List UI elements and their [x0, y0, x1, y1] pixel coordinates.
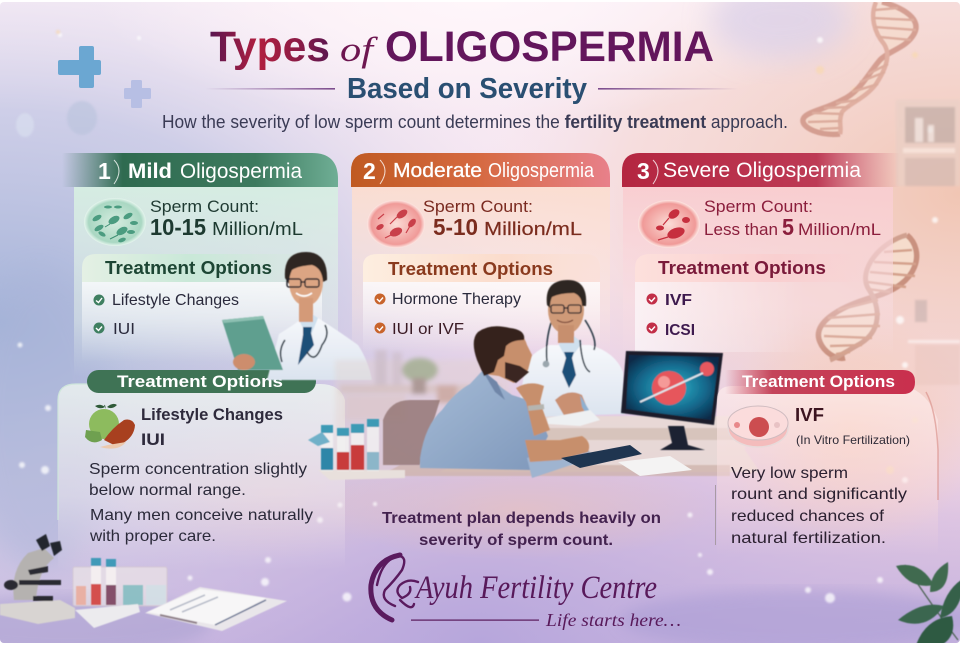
illustration: test tubes	[308, 419, 405, 480]
header: moderate: Moderate	[393, 159, 482, 182]
icon: sperm cells green	[84, 198, 146, 246]
text: mild description: Sperm concentration slightly	[89, 461, 307, 478]
text: mild description: with proper care.	[89, 528, 216, 545]
treatment options: moderate: IUI or IVF	[392, 321, 464, 338]
caption: treatment plan: severity of sperm count.	[419, 532, 613, 549]
illustration: green leaves	[896, 562, 964, 645]
text: mild options list: Lifestyle Changes	[141, 405, 283, 424]
sperm count: mild: Million/mL	[212, 218, 303, 239]
text: mild options list	[142, 408, 282, 445]
text: IVF heading	[795, 405, 910, 447]
title	[210, 31, 713, 70]
sperm count: severe: 5	[782, 214, 794, 240]
illustration: desk	[380, 416, 760, 476]
icon: small medical cross	[124, 80, 151, 108]
panel: moderate oligospermia	[351, 153, 610, 357]
logo swirl	[371, 555, 418, 620]
icon: petri dish	[728, 406, 788, 447]
text: severe description: rount and significantly	[731, 486, 907, 503]
illustration: keyboard	[561, 445, 642, 468]
header: moderate: 2	[363, 158, 376, 184]
pill heading: mild	[87, 370, 316, 393]
illustration: doctor with clipboard	[222, 252, 372, 380]
title: OLIGOSPERMIA	[385, 23, 714, 71]
icon: sperm cells red	[638, 200, 700, 248]
illustration: doctor at desk	[517, 280, 625, 426]
text: IVF heading: (In Vitro Fertilization)	[796, 433, 910, 447]
treatment options: severe: ICSI	[665, 322, 695, 339]
header: moderate	[351, 153, 610, 187]
treatment options: moderate	[363, 254, 600, 334]
DNA helix mid right	[818, 235, 917, 360]
logo: ayuh fertility centre: Life starts here…	[545, 610, 681, 630]
treatment options: mild: Treatment Options	[105, 258, 272, 278]
sperm count: mild	[150, 200, 302, 235]
sperm count: severe: Million/mL	[798, 220, 881, 239]
panel: mild oligospermia	[62, 153, 338, 377]
illustration: chair	[383, 400, 440, 465]
icon: large medical cross	[58, 46, 101, 88]
pill heading: severe	[725, 370, 915, 394]
card: severe treatment options	[715, 370, 938, 555]
header: mild: 1	[98, 158, 111, 184]
treatment options: severe: Treatment Options	[658, 258, 826, 278]
text: severe description: reduced chances of	[731, 508, 885, 525]
treatment options: mild: Lifestyle Changes	[112, 292, 239, 309]
illustration: consultation room backdrop	[336, 349, 508, 450]
subtitle: based on severity: Based on Severity	[347, 73, 587, 105]
header: mild	[62, 153, 338, 187]
sperm count: moderate	[424, 200, 582, 236]
text: severe description	[731, 465, 907, 547]
text: severe description: Very low sperm	[731, 465, 848, 482]
treatment options: mild	[82, 254, 322, 348]
DNA helix top right	[803, 2, 917, 134]
treatment options: severe	[635, 260, 826, 352]
illustration: patient	[420, 326, 590, 478]
illustration: computer monitor	[621, 351, 723, 450]
treatment options: moderate: Treatment Options	[388, 259, 553, 279]
title: of	[340, 30, 378, 69]
header: moderate: Oligospermia	[488, 160, 595, 182]
blurred shelf in background	[902, 105, 960, 384]
sperm count: moderate: 5-10	[433, 214, 478, 240]
pill heading: mild: Treatment Options	[117, 372, 283, 391]
treatment options: moderate: Hormone Therapy	[392, 291, 521, 308]
illustration: clipboard with papers	[145, 587, 287, 631]
sperm count: mild: 10-15	[150, 214, 206, 240]
header: mild: Oligospermia	[180, 160, 302, 183]
logo: ayuh fertility centre	[371, 555, 681, 630]
treatment options: mild: IUI	[113, 321, 135, 338]
text: mild description: Many men conceive naturally	[90, 507, 313, 524]
sperm count: moderate: Sperm Count:	[423, 197, 533, 216]
illustration: microscope	[0, 534, 75, 624]
panel: severe oligospermia	[622, 153, 900, 357]
text: severe description: natural fertilization.	[731, 530, 886, 547]
text: IVF heading: IVF	[795, 405, 824, 425]
illustration: papers	[618, 456, 692, 476]
caption: treatment plan	[382, 510, 661, 549]
sperm count: severe: Sperm Count:	[704, 197, 813, 216]
sperm count: severe: Less than	[704, 220, 778, 239]
treatment options: severe: IVF	[665, 292, 692, 309]
description line: How the severity of low sperm count determines the fertility treatment approach.	[162, 112, 788, 132]
text: mild options list: IUI	[141, 430, 165, 449]
icon: apple and food	[85, 404, 135, 449]
logo: ayuh fertility centre: Ayuh Fertility Centre	[414, 570, 657, 606]
header: mild: Mild	[128, 160, 172, 183]
card: mild treatment options	[57, 370, 345, 546]
title: Types	[210, 23, 330, 71]
sperm count: moderate: Million/mL	[484, 218, 582, 239]
header: severe: 3	[637, 158, 650, 184]
text: mild description: below normal range.	[89, 482, 246, 499]
illustration: lab glass tray	[73, 558, 167, 628]
text: mild description	[89, 461, 313, 545]
caption: treatment plan: Treatment plan depends heavily on	[382, 510, 661, 527]
pill heading: severe: Treatment Options	[742, 372, 895, 391]
sperm count: mild: Sperm Count:	[150, 197, 259, 216]
header: severe: Severe Oligospermia	[663, 159, 861, 182]
header: severe	[622, 153, 900, 187]
sperm count: severe	[704, 200, 880, 235]
icon: sperm cells orange	[367, 200, 425, 248]
